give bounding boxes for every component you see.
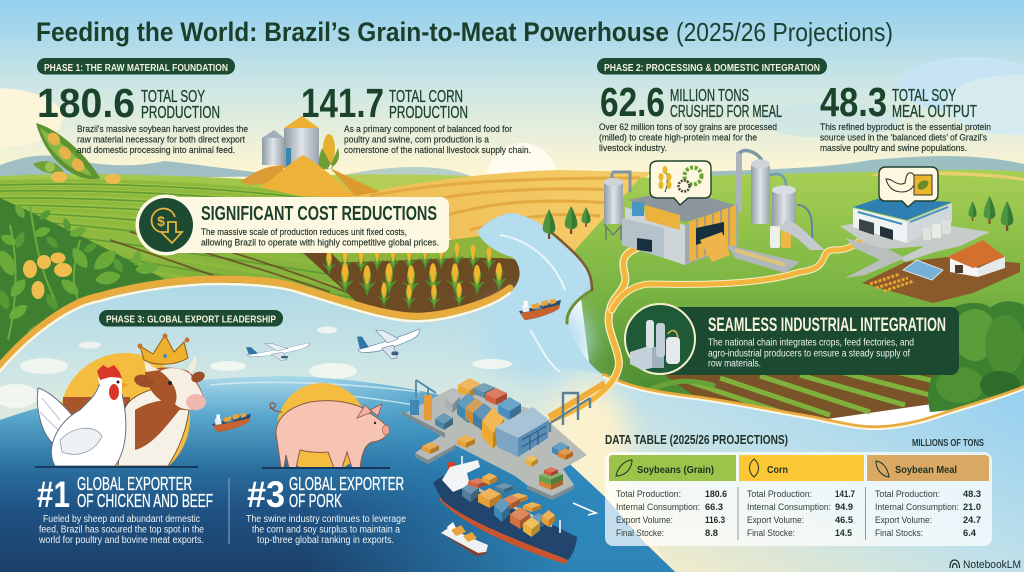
left land: soy field (0, 174, 520, 380)
background: sky (0, 0, 1024, 200)
sky clouds, lower left (0, 326, 512, 408)
illustration: plane right (357, 329, 420, 359)
column: soybean meal: 24.7 (963, 515, 981, 526)
column: soybean meal: Soybean Meal (895, 464, 957, 476)
notebooklm logo: NotebookLM (963, 559, 1021, 571)
lower open area: sky, river and coast (0, 213, 1024, 572)
stat: million tons crushed: CRUSHED FOR MEAL (670, 101, 782, 121)
stat: #1 exporter of chicken and beef (37, 474, 213, 546)
stat: #1 exporter of chicken and beef: GLOBAL EXPORTER (77, 474, 192, 494)
column: soybeans: Soybeans (Grain) (637, 464, 714, 476)
column: corn: Export Volume: (747, 515, 804, 526)
right land (575, 170, 1024, 410)
illustration: plane left (246, 343, 310, 360)
title: Feeding the World: Brazil’s Grain-to-Meat Powerhouse (36, 17, 669, 47)
stat: total corn production: As a primary component of balanced food for (344, 124, 513, 135)
panel: phase 3 heading pill: PHASE 3: GLOBAL EXPORT LEADERSHIP (106, 314, 276, 326)
illustration: barn and solar panel (903, 240, 1005, 280)
divider between exporters (228, 478, 230, 544)
column: soybeans: Internal Consumption: (616, 502, 700, 513)
column: soybean meal: 6.4 (963, 528, 977, 539)
stat: #3 exporter of pork: #3 (247, 474, 285, 515)
panel: phase 1 heading pill (37, 58, 235, 74)
illustration: silos and corn pile (240, 116, 380, 197)
stat: total soy production: raw material necessary for both direct export (77, 134, 245, 146)
illustration: small ship mid sea (212, 413, 251, 432)
illustration: chicken and cow with crown (35, 334, 206, 468)
soybean plants (0, 198, 170, 365)
column: corn: 94.9 (835, 502, 853, 513)
ocean (0, 376, 675, 572)
stat: #1 exporter of chicken and beef: OF CHICKEN AND BEEF (77, 491, 213, 511)
stat: total soy meal output: 48.3 (820, 79, 887, 125)
stat: #1 exporter of chicken and beef: Fueled by sheep and abundant demestic (43, 514, 200, 525)
stat: million tons crushed (599, 79, 782, 154)
illustration: container ship (433, 456, 577, 564)
stat: total soy production: PRODUCTION (141, 102, 220, 122)
column: corn: Corn (767, 464, 788, 476)
column: soybean meal: 48.3 (963, 489, 981, 500)
column: soybeans (609, 455, 736, 539)
stat: million tons crushed: (milled) to create high-protein meal for the (599, 132, 757, 144)
stat: total soy meal output: TOTAL SOY (892, 85, 956, 105)
column: soybeans: 66.3 (705, 502, 723, 513)
column: soybeans: 116.3 (705, 515, 725, 526)
stat: million tons crushed: MILLION TONS (670, 85, 749, 105)
panel: phase 2 heading pill (597, 58, 827, 74)
column: corn (739, 455, 864, 539)
stat: #3 exporter of pork: OF PORK (289, 491, 342, 511)
callout: significant cost reductions: SIGNIFICANT COST REDUCTIONS (201, 203, 437, 225)
stat: total corn production: PRODUCTION (389, 102, 468, 122)
callout: significant cost reductions (136, 194, 449, 256)
panel: phase 2 heading pill: PHASE 2: PROCESSING & DOMESTIC INTEGRATION (604, 62, 820, 74)
stat: #3 exporter of pork: top-three global ranking in exports. (257, 535, 394, 546)
stat: #1 exporter of chicken and beef: world for poultry and bovine meat exports. (38, 535, 204, 546)
illustration: trees (543, 196, 1013, 239)
stat: #3 exporter of pork: GLOBAL EXPORTER (289, 474, 404, 494)
stat: million tons crushed: Over 62 million tons of soy grains are processed (599, 122, 777, 133)
stat: #1 exporter of chicken and beef: feed, Brazil has socured the top spot in the (39, 524, 204, 536)
icon: processing plant (630, 320, 680, 370)
stat: total soy production: Brazil's massive soybean harvest provides the (77, 124, 248, 135)
right land field rows (645, 345, 960, 420)
column: corn: Internal Consumption: (747, 502, 831, 513)
illustration: small ship near port (441, 522, 488, 556)
column: corn: 141.7 (835, 489, 855, 500)
stat: million tons crushed: livestock industry. (599, 143, 667, 154)
stat: total corn production: 141.7 (301, 80, 384, 126)
column: soybean meal: Total Production: (875, 489, 940, 500)
stat: total corn production (301, 80, 531, 156)
stat: total soy meal output: massive poultry and swine populations. (820, 143, 967, 154)
column: soybean meal (867, 455, 989, 539)
callout: seamless industrial integration: row materials. (708, 358, 761, 370)
column: soybean meal: Internal Consumption: (875, 502, 959, 513)
background: distant hills (0, 156, 1024, 190)
callout: seamless industrial integration (625, 304, 959, 375)
golden grain road (552, 230, 885, 420)
callout: seamless industrial integration: The national chain integrates crops, feed fectories, and (708, 338, 914, 348)
column: corn: Total Production: (747, 489, 812, 500)
illustration: farm ground and roads (840, 222, 1020, 303)
title: (2025/26 Projections) (676, 17, 893, 47)
stat: total soy production: 180.6 (37, 80, 135, 126)
stat: total soy production: and domestic processing into animal feed. (77, 145, 235, 156)
gold field (340, 170, 650, 280)
column: corn: 14.5 (835, 528, 853, 539)
column: soybeans: Total Production: (616, 489, 681, 500)
column: soybean meal: Final Stocks: (875, 528, 923, 539)
stat: #3 exporter of pork (246, 474, 406, 546)
stat: total soy meal output: MEAL OUTPUT (892, 101, 977, 121)
icon bubble: grain and gears (650, 161, 711, 205)
column: soybeans: Export Volume: (616, 515, 673, 526)
stat: total corn production: cornerstone of the national livestock supply chain. (344, 145, 531, 156)
panel: phase 1 heading pill: PHASE 1: THE RAW MATERIAL FOUNDATION (44, 62, 228, 74)
stat: total soy meal output: source used in the ‘balanced diets’ of Grazil's (820, 132, 987, 144)
background land strip behind the pile (280, 174, 480, 200)
illustration: port and containers (402, 378, 605, 500)
column: soybean meal: Export Volume: (875, 515, 932, 526)
stat: total soy production: TOTAL SOY (141, 86, 205, 106)
illustration: factory (604, 151, 825, 273)
stat: total corn production: TOTAL CORN (389, 86, 463, 106)
table background (605, 452, 992, 546)
icon: dollar and down arrow: $ (157, 213, 165, 229)
column: soybean meal: 21.0 (963, 502, 981, 513)
stat: total soy meal output (820, 79, 991, 154)
callout: significant cost reductions: The massive scale of production reduces unit fixed costs, (201, 227, 407, 238)
column: soybeans: Final Stocke: (616, 528, 664, 539)
table title: DATA TABLE (2025/26 PROJECTIONS) (605, 432, 788, 447)
stat: #3 exporter of pork: The swine industry continues to leverage (246, 514, 406, 525)
stat: million tons crushed: 62.6 (600, 79, 665, 125)
right land bushes (928, 301, 1024, 412)
icon bubble: chicken and feed bag (879, 167, 938, 207)
gold coast borders (0, 233, 1024, 429)
column: corn: Final Stocke: (747, 528, 795, 539)
illustration: pig (262, 383, 390, 473)
data table (605, 432, 992, 546)
illustration: warehouse and storage (853, 198, 952, 243)
column: soybeans: 8.8 (705, 528, 719, 539)
column: corn: 46.5 (835, 515, 854, 526)
callout: seamless industrial integration: agro-industrial producers to ensure a steady supply of (708, 348, 910, 360)
column: soybeans: 180.6 (705, 489, 727, 500)
clouds and sun (0, 57, 1024, 213)
stat: total corn production: poultry and swine, corn production is a (344, 134, 490, 146)
callout: significant cost reductions: allowing Brazil to operate with highly competitive global prices. (201, 238, 439, 248)
stat: total soy meal output: This refined byproduct is the essential protein (820, 122, 991, 133)
gold sliver on far right hills (870, 171, 1024, 181)
panel: phase 3 heading pill (99, 310, 283, 326)
illustration: small ship in river (519, 299, 561, 320)
stat: total soy production (37, 80, 248, 156)
illustration: soybean pod (33, 123, 121, 184)
table unit label: MILLIONS OF TONS (912, 438, 984, 449)
stat: #3 exporter of pork: the corn and soy surplus to maintain a (252, 524, 400, 536)
corn field (300, 232, 530, 318)
stat: #1 exporter of chicken and beef: #1 (37, 474, 70, 515)
icon: dollar and down arrow (152, 209, 182, 243)
